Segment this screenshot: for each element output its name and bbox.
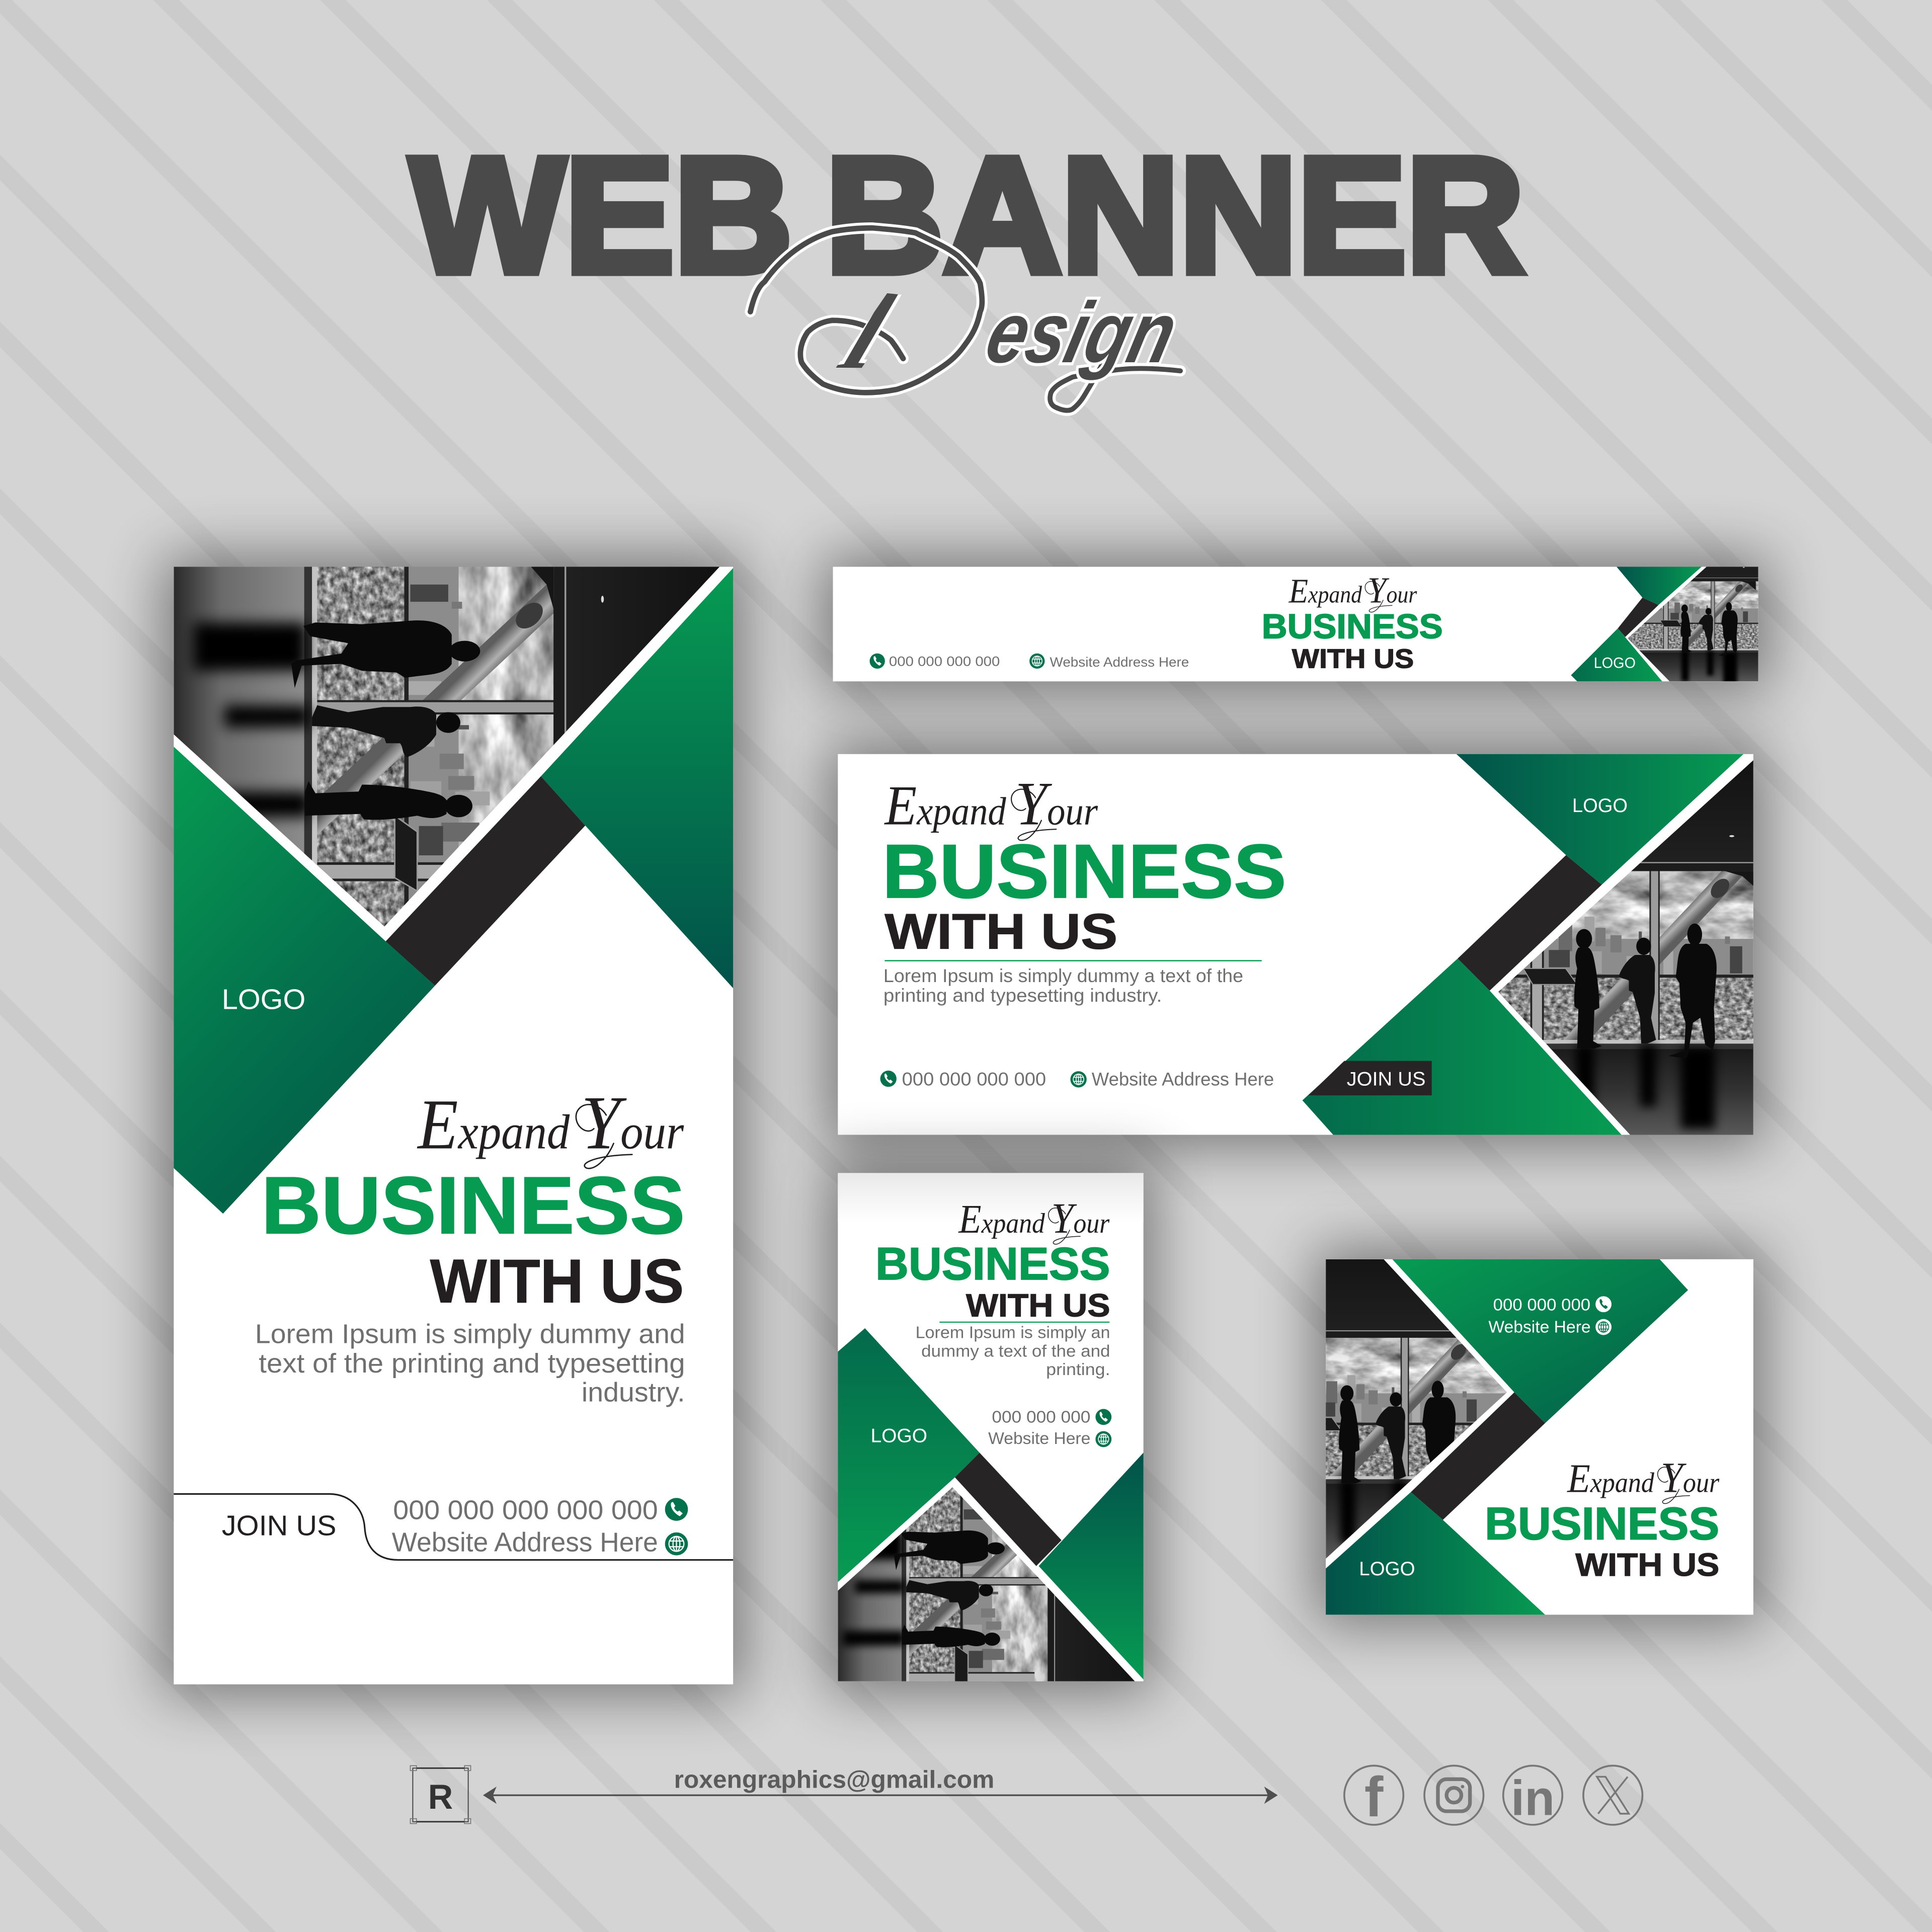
logo: LOGO [1572,795,1628,817]
heading: BUSINESS: BUSINESS [1262,607,1443,646]
contact: phone: 000 000 000 000 [902,1069,1046,1090]
join us label: JOIN US [222,1509,337,1541]
heading: WITH US: WITH US [1575,1547,1719,1583]
logo: LOGO [1594,655,1636,671]
contact: phone: 000 000 000 [992,1408,1090,1426]
body copy: printing. [1046,1360,1110,1379]
contact: phone: 000 000 000 [1493,1296,1590,1315]
heading: WITH US: WITH US [430,1247,684,1316]
footer logo: R mark: R [428,1778,453,1816]
script subtitle: Design: D [807,205,1025,410]
photo: rotated [837,1453,1161,1776]
dark band [386,776,585,986]
dark band [1411,1392,1545,1520]
green shape: bottom [1571,628,1662,681]
heading: BUSINESS: BUSINESS [261,1160,685,1251]
panel: tall story banner [164,488,747,1694]
green shape: left with logo [838,1328,980,1582]
body copy [916,1324,1110,1379]
script heading: Expand Your [417,1080,684,1165]
heading: BUSINESS: BUSINESS [882,829,1286,914]
green shape: bottom [1303,958,1622,1135]
email address: roxengraphics@gmail.com [674,1766,994,1793]
contact: website: Website Here [988,1429,1090,1448]
contact: website: Website Address Here [1050,655,1189,670]
script subtitle: Design: esign [978,284,1186,380]
body copy: Lorem Ipsum is simply dummy and [255,1319,685,1349]
body copy [883,965,1243,1006]
green shape: top with contact [1392,1259,1688,1423]
body copy: dummy a text of the and [921,1342,1110,1360]
panel: wide web banner [828,733,1811,1145]
script heading: Expand Your [1289,570,1417,611]
join us box: JOIN US [1347,1069,1425,1090]
logo: LOGO [222,984,305,1015]
contact: phone: 000 000 000 000 [889,654,1000,669]
icon: linkedin: in [1511,1770,1555,1825]
body copy: text of the printing and typesetting [259,1348,685,1379]
dark band [955,1453,1062,1566]
contact: website: Website Here [1488,1318,1591,1336]
heading: BUSINESS: BUSINESS [875,1239,1110,1290]
rule [939,1322,1109,1323]
script subtitle: Design [750,205,1186,411]
heading: BUSINESS: BUSINESS [1485,1499,1719,1550]
contact: website: Website Address Here [1092,1069,1274,1090]
panel: leaderboard strip banner [823,526,1776,691]
green shape: bottom with logo [1326,1492,1545,1615]
icon: facebook [1344,1765,1403,1828]
photo [1210,1225,1534,1560]
contact: phone: 000 000 000 000 000 [393,1495,658,1525]
script heading: Expand Your [1567,1454,1720,1502]
heading: WITH US: WITH US [1292,643,1414,674]
body copy: Lorem Ipsum is simply an [916,1324,1110,1342]
rule [884,960,1262,961]
green shape: top [1617,567,1702,605]
body copy [255,1319,685,1408]
dark band [1618,598,1658,637]
script heading: Expand Your [958,1194,1110,1242]
panel: small vertical banner [828,1163,1161,1776]
title: WEB BANNER: BANNER [826,124,1524,307]
icon: facebook: f [1364,1765,1384,1828]
icon: linkedin [1503,1765,1562,1825]
arrow: double headed [483,1787,1278,1804]
contact: website: Website Address Here [392,1527,658,1557]
heading: WITH US: WITH US [966,1288,1110,1324]
green shape: top with logo [1457,754,1743,884]
green shape: right [1038,1453,1144,1679]
script heading: Expand Your [884,770,1098,838]
icon: instagram [1424,1765,1484,1825]
footer logo: R mark [411,1765,471,1823]
logo: LOGO [870,1425,927,1447]
dark band [1458,855,1602,991]
join us box [1309,1061,1432,1095]
body copy: industry. [582,1378,685,1408]
title: WEB BANNER [411,124,1524,307]
heading: WITH US: WITH US [884,904,1117,960]
green shape: top right [541,568,733,988]
curved divider [174,1494,733,1560]
photo [1618,526,1776,684]
title: WEB BANNER: WEB [411,124,792,307]
green shape: left with logo [174,747,435,1214]
panel: square banner [1210,1225,1763,1624]
body copy: Lorem Ipsum is simply dummy a text of the [883,965,1243,986]
photo [1417,733,1811,1136]
body copy: printing and typesetting industry. [883,985,1162,1006]
logo: LOGO [1359,1558,1415,1580]
icon: x [1583,1765,1642,1825]
photo: rotated office silhouettes [174,488,747,1040]
